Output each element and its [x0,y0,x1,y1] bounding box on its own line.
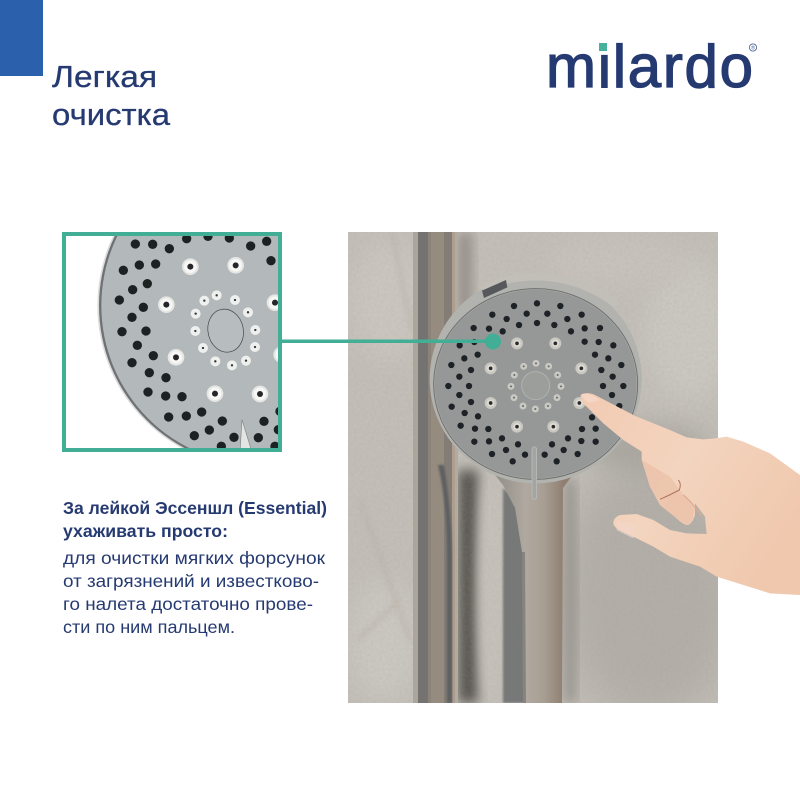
inset: nozzle close-up [97,236,278,448]
handle [496,476,571,703]
logo: milardo: milardo [546,33,753,100]
blue corner block [0,0,43,76]
description text [63,498,327,637]
title: Легкая [52,59,157,94]
description text: го налета достаточно прове- [63,594,313,614]
description text: для очистки мягких форсунок [63,548,325,568]
head face close-up [97,236,278,448]
logo: milardo: ® [751,44,755,52]
spray nozzles [445,300,626,464]
photo: shower head on stone wall [348,232,740,720]
stone wall background [348,232,740,720]
shower head [430,275,642,499]
title [52,59,171,132]
description text: сти по ним пальцем. [63,617,235,637]
description text: За лейкой Эссеншл (Essential) [63,498,327,518]
title: очистка [52,97,171,132]
hand pressing nozzle [581,393,800,595]
slide rail [413,232,458,703]
description text: от загрязнений и известково- [63,571,319,591]
inset frame and connector line [64,234,501,450]
description text: ухаживать просто: [63,521,228,541]
